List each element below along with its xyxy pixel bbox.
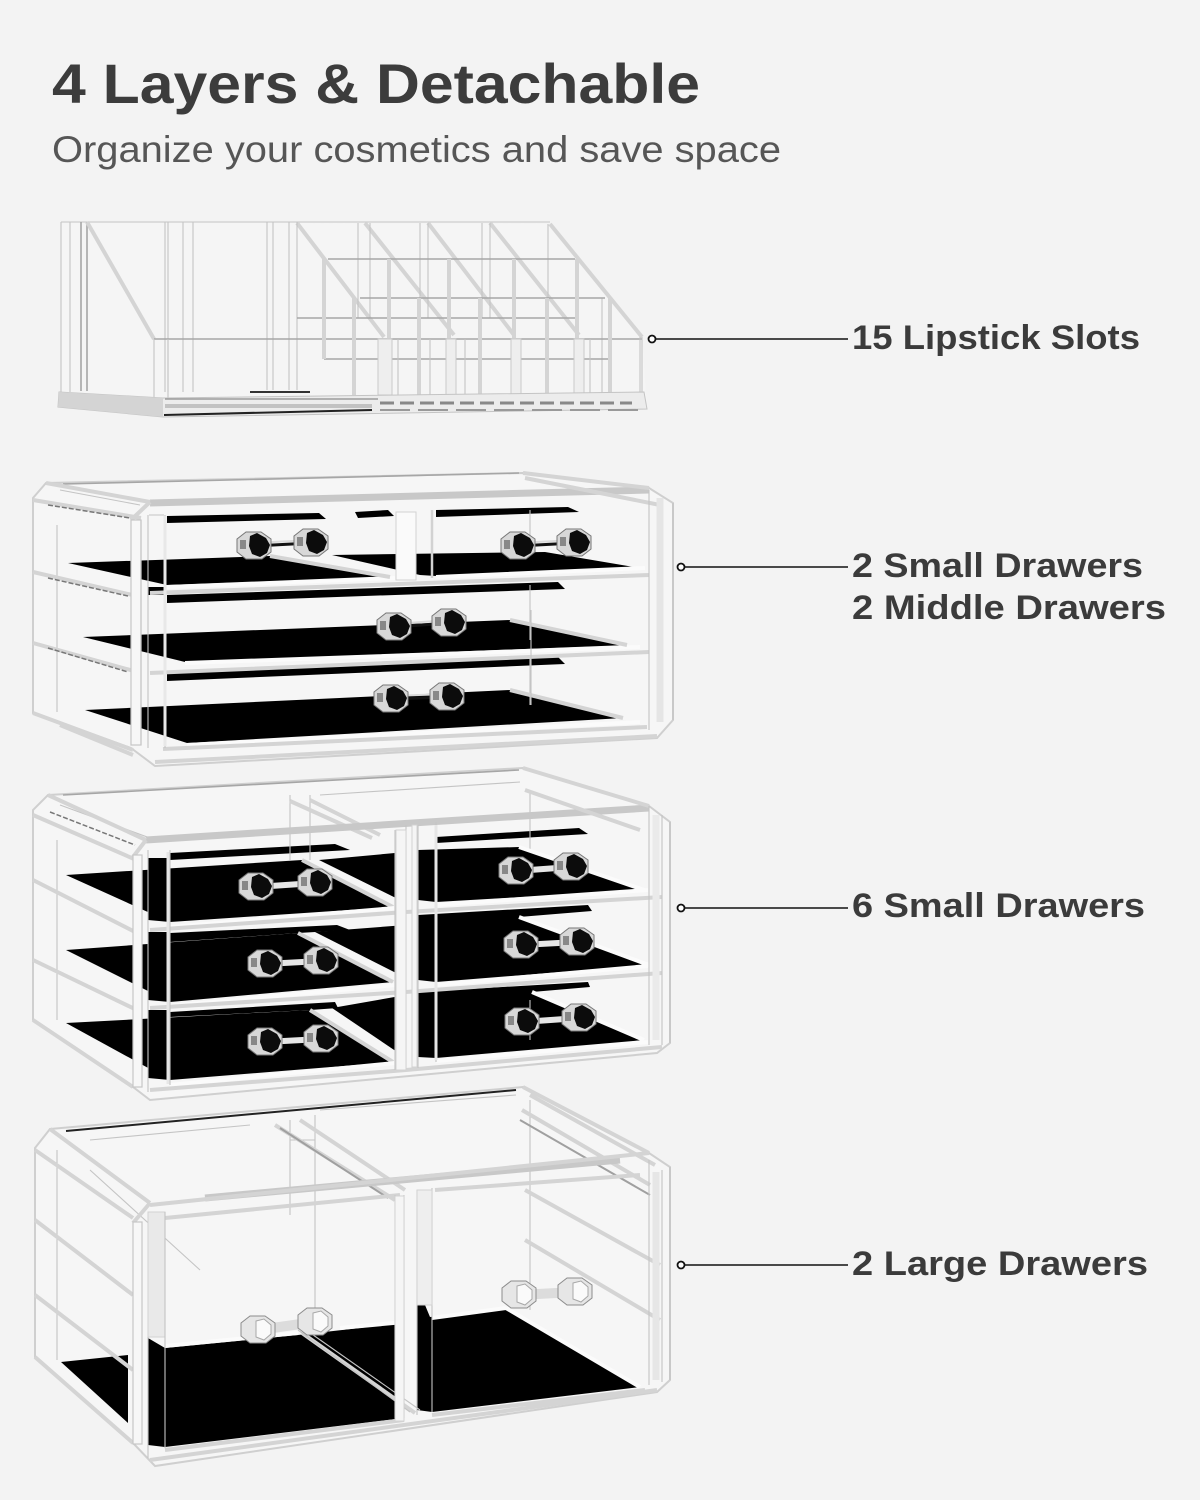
tier 2 knobs	[237, 529, 591, 712]
tier 2: 2 small + 2 middle drawers	[33, 473, 673, 766]
callout: 2 small and 2 middle drawers: 2 Small Drawers	[852, 547, 1143, 585]
callout: 2 large drawers	[678, 1245, 1148, 1283]
tier 4 black drawer liners	[61, 1305, 640, 1447]
tier 3 front posts	[133, 855, 142, 1087]
title: 4 Layers & Detachable	[52, 52, 700, 115]
tier 4: 2 large drawers	[35, 1087, 670, 1466]
callout: 2 large drawers: 2 Large Drawers	[852, 1245, 1148, 1283]
callout: 2 small and 2 middle drawers: 2 Middle Drawers	[852, 589, 1166, 627]
tier 1: lipstick organizer	[58, 222, 647, 417]
callout: 6 small drawers	[678, 887, 1145, 925]
tier 2 body	[33, 473, 673, 766]
tier 4 body	[35, 1087, 670, 1466]
callout: 15 lipstick slots: 15 Lipstick Slots	[852, 319, 1140, 357]
callout: 6 small drawers: 6 Small Drawers	[852, 887, 1145, 925]
tier 4 front posts	[133, 1222, 142, 1444]
tier 3 knobs	[239, 853, 596, 1055]
tier 2 front posts	[131, 520, 141, 745]
tier 4 knobs	[241, 1278, 592, 1343]
callout: 15 lipstick slots	[648, 319, 1140, 357]
subtitle: Organize your cosmetics and save space	[52, 129, 781, 170]
tier 3: 6 small drawers	[33, 768, 670, 1100]
callout: 2 small and 2 middle drawers	[678, 547, 1166, 627]
tier 3 black drawer liners	[66, 828, 649, 1080]
tier 2 black drawer liners	[68, 507, 640, 743]
tier 3 body	[33, 768, 670, 1100]
